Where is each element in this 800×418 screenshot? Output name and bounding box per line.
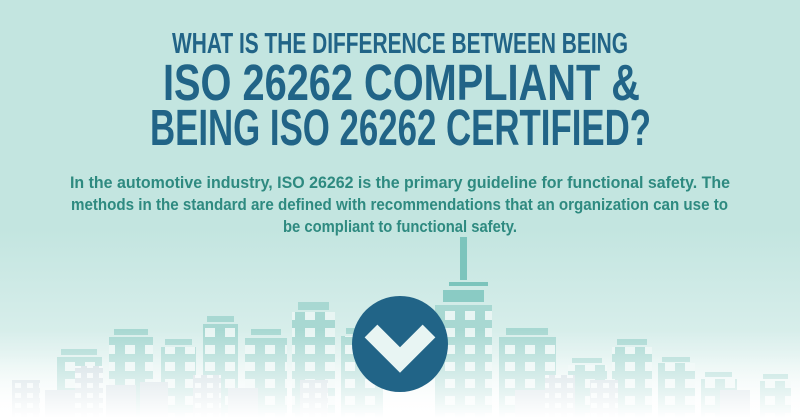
intro paragraph: In the automotive industry, ISO 26262 is the primary guideline for functional safety. The [70,174,730,192]
title: WHAT IS THE DIFFERENCE BETWEEN BEING [172,28,628,60]
intro paragraph: methods in the standard are defined with recommendations that an organization can use to [71,196,728,214]
title: ISO 26262 COMPLIANT & [163,54,640,111]
intro paragraph [70,174,730,236]
icon: check circle [352,296,448,392]
intro paragraph: be compliant to functional safety. [283,218,517,236]
city skyline [0,237,800,418]
title [150,28,651,156]
